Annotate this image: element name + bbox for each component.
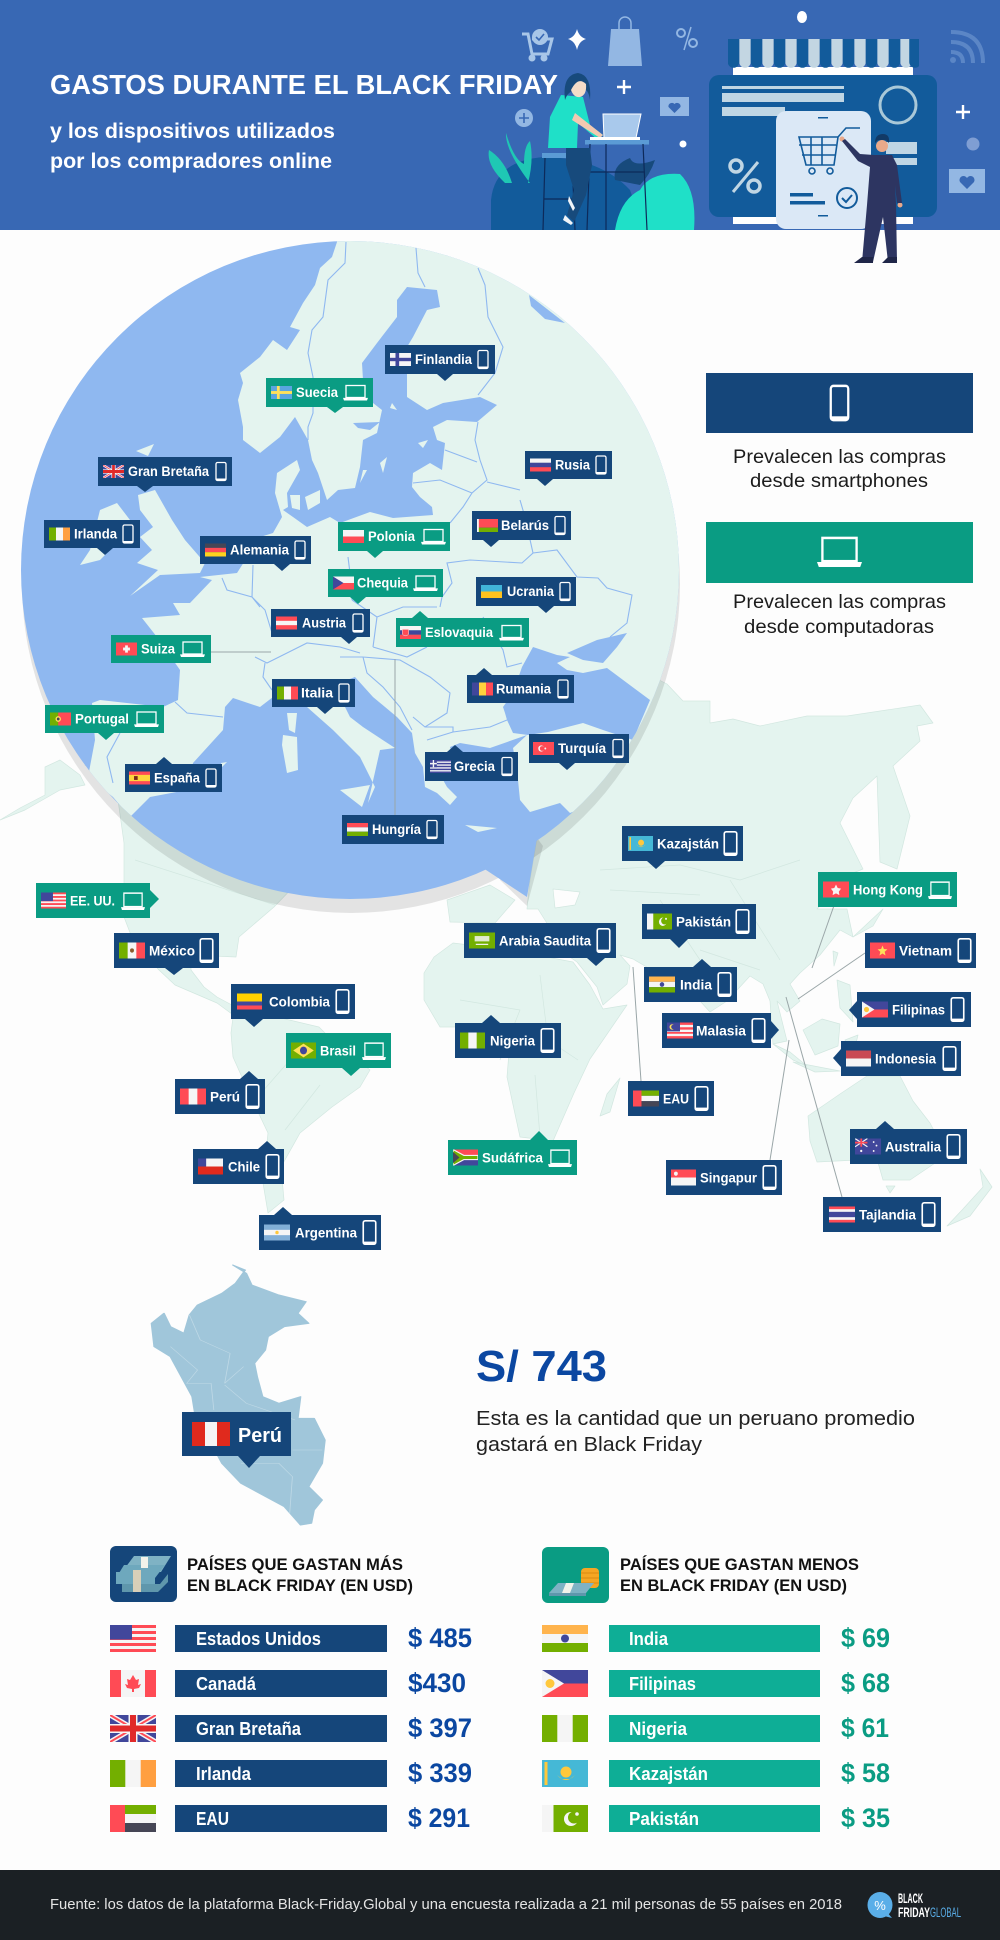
Lake Vanern — [353, 422, 380, 430]
row: Kazajstán: Kazajstán — [629, 1764, 708, 1784]
label: Rumania: Rumania — [496, 682, 551, 696]
label: Filipinas: Filipinas — [892, 1002, 945, 1018]
panel: Peru — [151, 1265, 325, 1525]
label: Alemania — [200, 536, 311, 571]
label: Grecia: Grecia — [454, 759, 495, 774]
subtitle: y los dispositivos utilizados — [50, 120, 335, 143]
label: Hong Kong — [818, 872, 957, 907]
label: Argentina — [259, 1207, 381, 1250]
heading — [620, 1555, 859, 1595]
row: India: India — [629, 1629, 669, 1649]
map of Peru — [151, 1265, 325, 1525]
heading: EN BLACK FRIDAY (EN USD) — [187, 1577, 413, 1595]
label: Suiza — [111, 635, 211, 663]
row: Gran Bretaña: $ 397 — [408, 1713, 472, 1743]
row: Pakistán — [542, 1803, 890, 1833]
map shadow — [22, 255, 680, 913]
heading: PAÍSES QUE GASTAN MÁS — [187, 1555, 403, 1574]
row: India: $ 69 — [841, 1623, 890, 1653]
stat: average spend: S/ 743 — [476, 1342, 607, 1391]
label: Colombia — [231, 984, 355, 1027]
label: Brasil: Brasil — [320, 1044, 356, 1058]
label: Irlanda — [44, 520, 140, 555]
panel: countries spending least — [542, 1547, 890, 1833]
Arctic islands — [0, 760, 85, 820]
label: Rusia — [525, 451, 612, 486]
label: Argentina: Argentina — [295, 1226, 357, 1240]
Islands of Asia — [773, 909, 945, 1075]
label: Vietnam: Vietnam — [899, 944, 952, 958]
row: Pakistán: Pakistán — [629, 1809, 699, 1829]
logo: % — [874, 1898, 886, 1913]
row: Irlanda: $ 339 — [408, 1758, 472, 1788]
label: México: México — [149, 944, 195, 958]
label: Malasia: Malasia — [696, 1024, 747, 1038]
title: GASTOS DURANTE EL BLACK FRIDAY — [50, 69, 558, 100]
islands — [136, 403, 497, 832]
label: Suecia: Suecia — [296, 385, 338, 400]
label: Vietnam — [865, 933, 976, 968]
White Sea — [529, 295, 565, 323]
row: India — [542, 1623, 890, 1653]
illustration: man pointing at phone — [840, 134, 902, 263]
label: EE. UU.: EE. UU. — [70, 894, 115, 908]
heading: PAÍSES QUE GASTAN MENOS — [620, 1555, 859, 1574]
Sea of Azov — [567, 633, 627, 663]
panel: countries spending most — [110, 1546, 472, 1833]
row: Nigeria: $ 61 — [841, 1713, 889, 1743]
header banner — [0, 0, 1000, 263]
icon: floating shopping symbols — [515, 11, 985, 193]
label: Rumania — [467, 668, 574, 703]
legend: smartphones: Prevalecen las compras — [733, 446, 946, 468]
label: EAU: EAU — [663, 1092, 689, 1106]
label: Colombia: Colombia — [269, 994, 330, 1010]
stat: average spend: Esta es la cantidad que un peruano promedio — [476, 1407, 915, 1430]
row: EAU: EAU — [196, 1809, 229, 1829]
Eurasia and Middle East — [527, 650, 933, 1044]
label: India: India — [680, 978, 712, 992]
label: Arabia Saudita: Arabia Saudita — [499, 934, 591, 948]
label: Chequia — [328, 569, 443, 604]
label: Singapur: Singapur — [700, 1170, 758, 1186]
label: Australia — [850, 1121, 967, 1164]
label: Perú (map): Perú — [210, 1090, 240, 1104]
row: Irlanda — [110, 1758, 472, 1788]
legend: computers: desde computadoras — [744, 616, 934, 638]
label: Australia: Australia — [885, 1140, 941, 1154]
row: Canadá — [110, 1668, 466, 1698]
label: España — [125, 757, 222, 792]
label: Tajlandia — [823, 1197, 941, 1232]
row: Filipinas — [542, 1668, 890, 1698]
label: Perú — [182, 1412, 291, 1468]
North America — [85, 740, 300, 1017]
label: Sudáfrica — [448, 1131, 577, 1175]
legend: computers: Prevalecen las compras — [733, 591, 946, 613]
label: Pakistán: Pakistán — [676, 914, 731, 930]
mainland Europe — [89, 241, 679, 816]
label: Filipinas — [849, 992, 971, 1027]
label: Irlanda: Irlanda — [74, 526, 117, 542]
row: Filipinas: Filipinas — [629, 1674, 696, 1694]
label: Arabia Saudita — [464, 923, 616, 966]
subtitle: por los compradores online — [50, 150, 332, 173]
label: Eslovaquia: Eslovaquia — [425, 625, 493, 640]
row: Pakistán: $ 35 — [841, 1803, 890, 1833]
row: Kazajstán: $ 58 — [841, 1758, 890, 1788]
logo: FRIDAY — [898, 1905, 930, 1920]
row: Nigeria: Nigeria — [629, 1719, 688, 1739]
label: Grecia — [425, 745, 518, 781]
label: Brasil — [286, 1033, 391, 1076]
footer — [0, 1870, 1000, 1940]
Africa — [424, 943, 627, 1141]
label: Ucrania — [476, 577, 576, 613]
row: Estados Unidos: $ 485 — [408, 1623, 472, 1653]
label: Kazajstán — [622, 826, 743, 869]
Great Britain — [130, 490, 205, 596]
row: EAU: $ 291 — [408, 1803, 470, 1833]
label: Turquía — [529, 734, 629, 770]
Australia — [808, 1076, 947, 1180]
row: EAU — [110, 1803, 470, 1833]
legend: smartphones: desde smartphones — [750, 470, 928, 492]
label: Portugal — [45, 705, 164, 740]
Black Sea — [503, 647, 650, 740]
row: Gran Bretaña — [110, 1713, 472, 1743]
label: Chile — [193, 1141, 284, 1184]
label: Chequia: Chequia — [357, 576, 408, 590]
label: Italia: Italia — [301, 686, 334, 700]
label: Malasia — [662, 1013, 779, 1048]
label: Hong Kong: Hong Kong — [853, 882, 923, 898]
row: Filipinas: $ 68 — [841, 1668, 890, 1698]
label: Pakistán — [642, 904, 756, 948]
row: Estados Unidos: Estados Unidos — [196, 1629, 321, 1649]
label: Eslovaquia — [396, 611, 529, 647]
callout pointer — [480, 838, 537, 897]
row: Nigeria — [542, 1713, 889, 1743]
map: Europe magnified circle — [21, 200, 700, 899]
illustration: shop — [709, 34, 937, 229]
label: Gran Bretaña: Gran Bretaña — [128, 464, 209, 479]
row: Kazajstán — [542, 1758, 890, 1788]
label: EE. UU. — [36, 883, 159, 918]
Ireland — [80, 503, 130, 565]
legend: computers — [706, 522, 973, 638]
New Zealand — [947, 1169, 992, 1226]
label: Portugal: Portugal — [75, 712, 129, 726]
row: Estados Unidos — [110, 1623, 472, 1653]
label: EAU — [628, 1081, 714, 1116]
label: Belarús — [472, 511, 571, 547]
label: Belarús: Belarús — [501, 518, 549, 533]
label: Indonesia — [833, 1041, 961, 1076]
icon: money and coins — [542, 1547, 609, 1603]
label: Gran Bretaña — [98, 457, 232, 492]
label: Finlandia: Finlandia — [415, 352, 472, 367]
label: Tajlandia: Tajlandia — [859, 1208, 916, 1222]
borders — [107, 242, 632, 783]
label: Austria — [271, 609, 370, 644]
label: Sudáfrica: Sudáfrica — [482, 1150, 543, 1166]
Black Sea — [553, 889, 580, 908]
label: Nigeria — [455, 1015, 561, 1058]
label: Rusia: Rusia — [555, 458, 590, 472]
label: Perú: Perú — [238, 1425, 282, 1447]
stat: average spend: gastará en Black Friday — [476, 1433, 703, 1456]
label: Ucrania: Ucrania — [507, 584, 554, 599]
logo: BLACK — [898, 1891, 923, 1906]
source text: Fuente: los datos de la plataforma Black-Friday.Global y una encuesta realizada a 21 mil personas de 55 países en 2018 — [50, 1897, 842, 1913]
stat: average spend — [476, 1342, 915, 1456]
label: Finlandia — [385, 345, 495, 381]
label: Chile: Chile — [228, 1160, 260, 1174]
label: Suiza: Suiza — [141, 642, 175, 656]
leader lines — [211, 652, 865, 1197]
label: Turquía: Turquía — [558, 741, 606, 756]
legend: smartphones — [706, 373, 973, 492]
row: Canadá: $430 — [408, 1668, 466, 1698]
label: Nigeria: Nigeria — [490, 1034, 535, 1048]
heading: EN BLACK FRIDAY (EN USD) — [620, 1577, 847, 1595]
label: Hungría — [342, 815, 444, 844]
icon: money stacks — [110, 1546, 177, 1602]
label: Alemania: Alemania — [230, 542, 289, 558]
label: Kazajstán: Kazajstán — [657, 836, 719, 852]
label: Polonia: Polonia — [368, 529, 415, 544]
label: Perú (map) — [175, 1071, 265, 1114]
Madagascar — [600, 1078, 620, 1116]
South America — [231, 1017, 370, 1213]
label: Indonesia: Indonesia — [875, 1052, 936, 1066]
illustration: woman with laptop — [489, 73, 694, 230]
label: México — [114, 933, 219, 975]
label: Austria: Austria — [302, 616, 346, 630]
row: Irlanda: Irlanda — [196, 1764, 252, 1784]
label: Suecia — [266, 378, 373, 413]
label: Singapur — [666, 1160, 782, 1195]
row: Gran Bretaña: Gran Bretaña — [196, 1719, 302, 1739]
subtitle — [50, 120, 335, 173]
heading — [187, 1555, 413, 1595]
label: Polonia — [338, 522, 450, 558]
label: India — [644, 959, 737, 1002]
row: Canadá: Canadá — [196, 1674, 257, 1694]
Balkan region — [447, 885, 515, 923]
label: Hungría: Hungría — [372, 822, 421, 837]
logo: GLOBAL — [930, 1905, 961, 1920]
label: España: España — [154, 770, 200, 786]
logo — [868, 1891, 961, 1920]
label: Italia — [272, 679, 355, 714]
world map — [0, 650, 992, 1226]
country borders — [135, 860, 800, 1137]
